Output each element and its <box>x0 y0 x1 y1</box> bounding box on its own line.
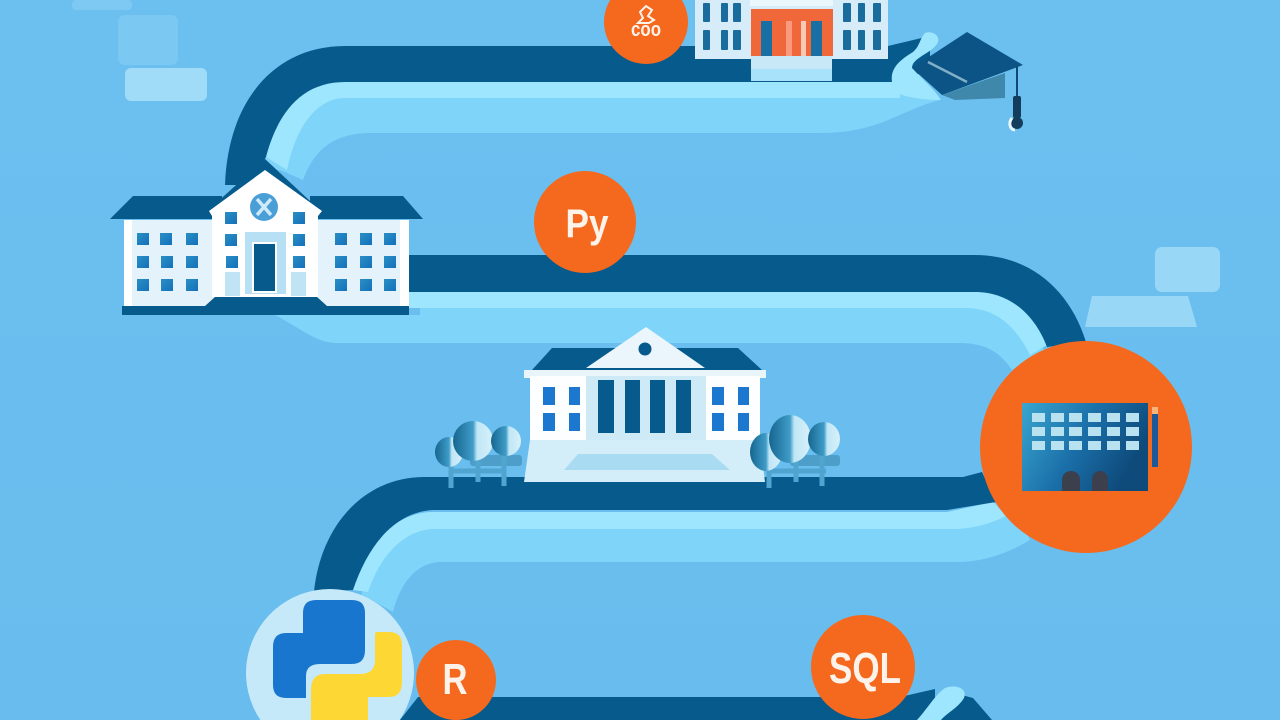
road 2: middle road with light band <box>275 255 1086 370</box>
icon: graduation cap at end of top road <box>832 32 1023 130</box>
road 4: bottom road <box>400 689 935 720</box>
icon: left trees <box>435 421 522 488</box>
icon: orange badge coo <box>604 0 688 64</box>
icon: orange badge R: R <box>442 655 468 704</box>
icon: orange badge SQL with cap fragment <box>811 615 992 720</box>
road 3: lower road with light band <box>314 472 1030 612</box>
icon: right trees <box>750 415 840 488</box>
road 1: top road with light band <box>225 36 940 185</box>
icon: orange badge SQL with cap fragment: SQL <box>829 644 901 693</box>
icon: top building <box>695 0 888 81</box>
icon: orange badge coo: coo <box>631 19 661 41</box>
icon: large orange badge with building tile <box>980 341 1192 553</box>
icon: orange badge R <box>416 640 496 720</box>
decorative clouds <box>72 0 1220 327</box>
icon: Python logo badge <box>246 589 414 720</box>
icon: orange badge Py: Py <box>566 202 609 246</box>
icon: orange badge Py <box>534 171 636 273</box>
icon: left school building <box>110 159 423 315</box>
icon: centre classical building with trees <box>435 327 840 488</box>
